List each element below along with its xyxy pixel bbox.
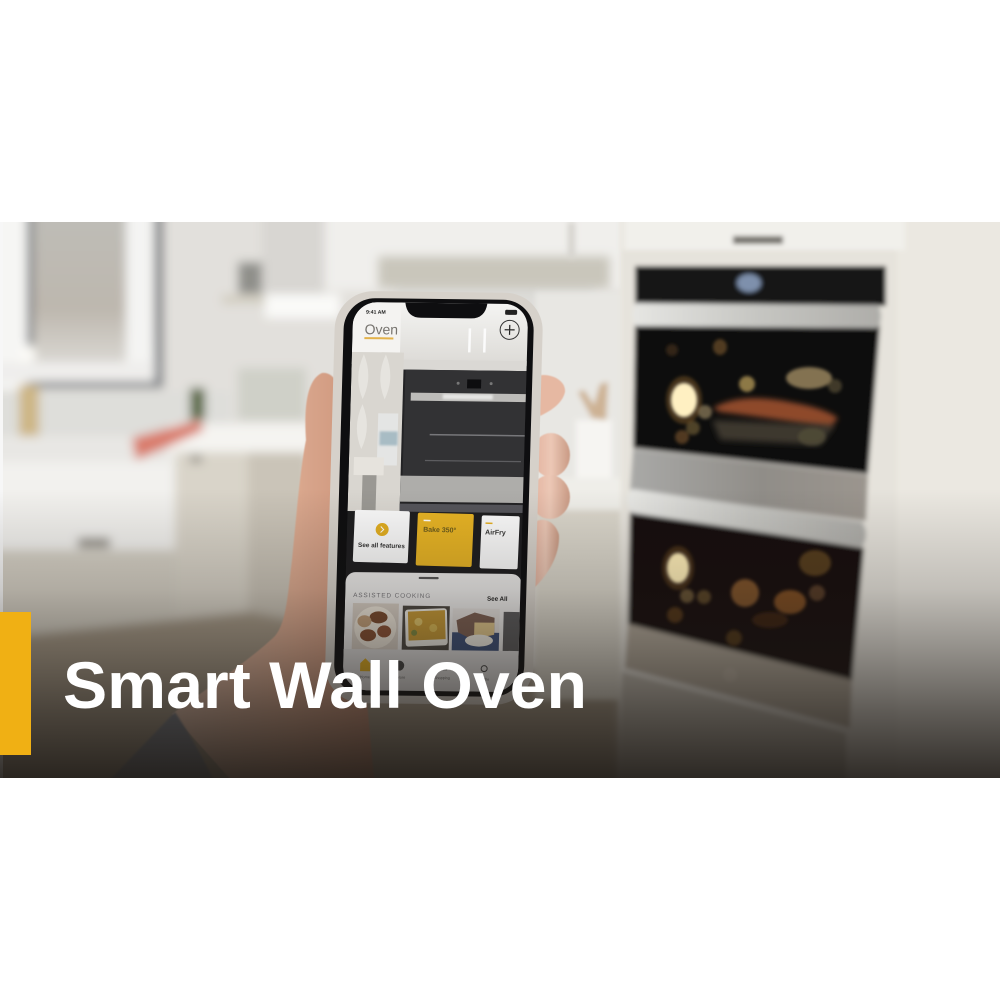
notch bbox=[405, 303, 487, 319]
link: see all: See All bbox=[487, 596, 508, 603]
icon: profile bbox=[481, 666, 487, 672]
upper oven bokeh lights bbox=[666, 339, 842, 446]
lower oven steel panel bbox=[625, 624, 852, 728]
background: left of kitchen with window and sink bbox=[3, 222, 620, 778]
upper oven window bbox=[633, 325, 880, 474]
add button bbox=[500, 320, 519, 339]
card: see all features bbox=[353, 510, 410, 563]
hand: palm and thumb side bbox=[172, 373, 375, 790]
recipe image: fourth bbox=[502, 612, 521, 657]
app dark band bbox=[348, 511, 522, 518]
app cabinet area bbox=[352, 302, 529, 366]
background: wall oven bbox=[618, 215, 1000, 790]
status time: 9:41 AM bbox=[366, 310, 386, 316]
tab bar bbox=[340, 649, 522, 693]
card: see all features: See all features bbox=[358, 542, 405, 550]
left edge light strip bbox=[0, 364, 3, 778]
icon: home bbox=[360, 658, 370, 671]
app oven handle bbox=[411, 393, 527, 402]
panel: assisted cooking bbox=[342, 572, 522, 704]
phone bezel bbox=[333, 298, 534, 697]
kitchen photo bbox=[0, 200, 1000, 800]
tab bar: Home bbox=[360, 675, 370, 679]
card: bake 350 bbox=[416, 513, 474, 567]
app artwork bbox=[377, 413, 398, 466]
card: bake 350: Bake 350° bbox=[423, 526, 457, 535]
dark gradient overlay bbox=[0, 222, 1000, 778]
upper oven steel panel bbox=[630, 449, 868, 521]
sleeve bbox=[140, 712, 197, 752]
warming drawer bbox=[621, 673, 844, 750]
phone bbox=[324, 291, 544, 705]
wallpaper bbox=[347, 352, 404, 513]
oven clock bbox=[467, 379, 481, 389]
title: Smart Wall Oven bbox=[63, 648, 587, 722]
yellow accent bar bbox=[0, 612, 31, 755]
icon: shopping bbox=[438, 664, 447, 670]
card: airfry bbox=[480, 515, 520, 569]
app lamp bbox=[354, 457, 384, 475]
recipe image: casserole bbox=[402, 606, 450, 652]
hand: right fingertips bbox=[536, 374, 570, 587]
card: airfry: AirFry bbox=[485, 529, 506, 537]
recipe image: roast platter bbox=[352, 603, 399, 651]
tab bar: Shopping bbox=[434, 676, 450, 680]
app oven bbox=[403, 370, 528, 477]
upper oven handle bbox=[632, 303, 881, 328]
phone screen bbox=[340, 302, 531, 704]
phone case bbox=[324, 291, 544, 705]
lower oven bokeh lights bbox=[661, 545, 832, 646]
lower oven window bbox=[628, 512, 864, 681]
recipe image: layered cake bbox=[452, 608, 500, 656]
infographic canvas bbox=[0, 222, 1000, 778]
app feature cards bbox=[353, 510, 520, 569]
upper oven control panel bbox=[635, 266, 886, 306]
background: wall and cabinet behind phone bbox=[535, 222, 630, 700]
lower oven handle bbox=[627, 489, 866, 547]
label: assisted cooking: ASSISTED COOKING bbox=[353, 592, 431, 600]
heading underline bbox=[364, 337, 393, 339]
icon: explore bbox=[394, 661, 404, 671]
status icons bbox=[505, 310, 517, 315]
heading: Oven: Oven bbox=[364, 321, 398, 338]
tab bar: Profile bbox=[478, 678, 489, 682]
tab bar: Explore bbox=[392, 676, 405, 680]
